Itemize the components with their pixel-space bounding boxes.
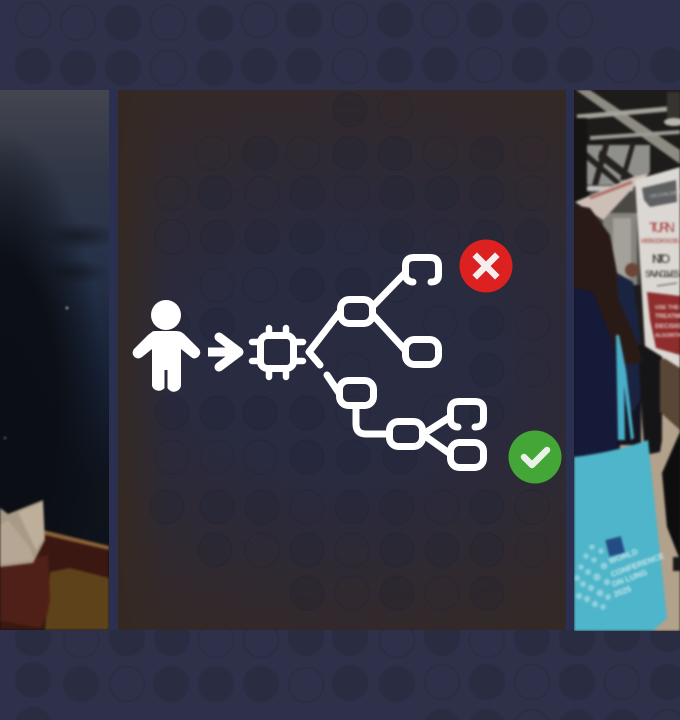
sign: TURN: [649, 219, 675, 235]
sign: MISSING DIAGNOSIS: [641, 239, 679, 245]
tote bag: CONFERENCE: [610, 551, 666, 579]
photo: left, dark wall with cloth and wooden floor: [0, 90, 120, 630]
cloth, bag and wooden floor: [0, 307, 109, 630]
icon: algorithm chip: [252, 328, 303, 377]
seam between left photo and centre panel: [109, 90, 118, 630]
tote bag: WORLD: [608, 547, 639, 566]
sign: [635, 167, 680, 368]
icon: child figure: [133, 300, 200, 392]
icon: red cross: [460, 240, 512, 292]
seam between centre panel and right photo: [566, 90, 574, 630]
panel: centre: [118, 90, 566, 630]
lower branch: [327, 375, 484, 468]
person: top and hair: [574, 205, 642, 460]
sign: INTO: [652, 252, 670, 266]
icon: green check: [508, 430, 562, 484]
banner: [575, 173, 650, 220]
background pattern: bottom band: [16, 616, 680, 720]
upper branch: [309, 258, 438, 365]
tote bag: ON LUNG: [611, 568, 648, 589]
ceiling and beams: [573, 90, 680, 285]
photo: right, conference protester with sign and tote bag: [573, 90, 680, 631]
background pattern: top band: [16, 2, 680, 86]
floor and bystanders: [617, 263, 680, 631]
arrow: child to algorithm: [208, 337, 239, 367]
tote bag: [574, 335, 667, 631]
tote bag: 2025: [613, 584, 633, 599]
faint panel pattern: [150, 93, 550, 610]
sign: SAVING LIVES: [645, 269, 680, 279]
diagram: decision tree: [309, 258, 484, 468]
